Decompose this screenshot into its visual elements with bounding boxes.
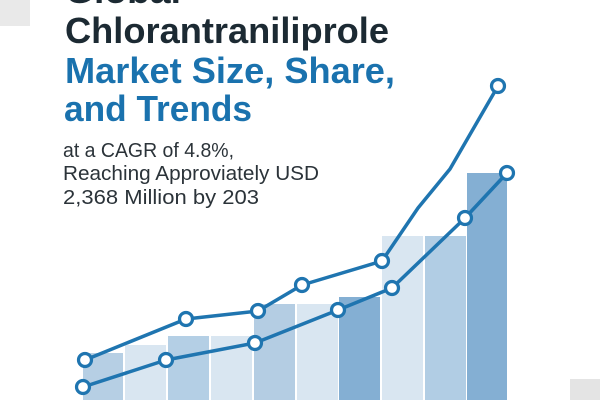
title: Chlorantraniliprole [65,10,389,51]
title: and Trends [64,88,252,129]
subtitle: 2,368 Million by 203 [63,186,259,209]
subtitle: at a CAGR of 4.8%, [63,139,234,162]
bar chart [83,173,507,400]
lower trend line [76,166,514,394]
subtitle [63,139,319,209]
title: Market Size, Share, [65,50,395,91]
subtitle: Reaching Approviately USD [63,162,319,185]
upper trend line [78,80,504,366]
title [64,0,395,129]
